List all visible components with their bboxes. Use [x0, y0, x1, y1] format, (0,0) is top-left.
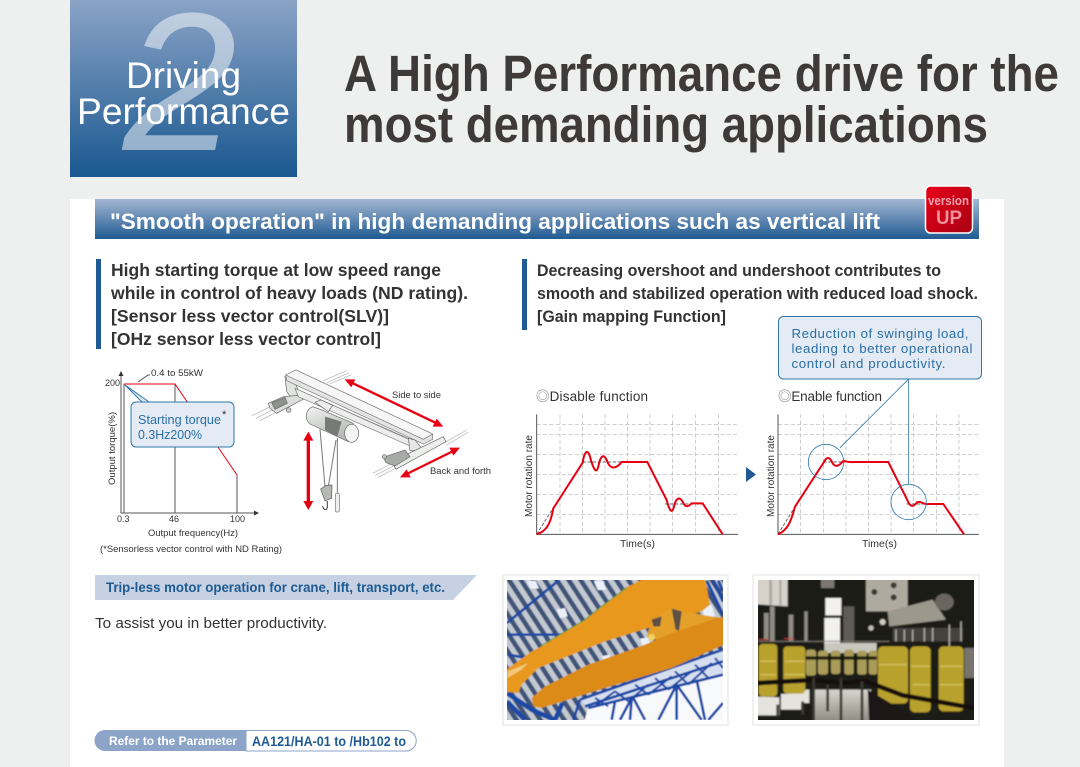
left text block: [OHz sensor less vector control]	[111, 329, 381, 349]
parameter reference pill: AA121/HA-01 to /Hb102 to	[252, 734, 406, 749]
torque chart	[100, 368, 282, 554]
sky and truss	[584, 674, 723, 720]
hoist	[315, 400, 333, 412]
speed curve with reduced overshoot	[778, 458, 964, 534]
torque chart: 46	[169, 514, 179, 524]
left text block: while in control of heavy loads (ND rating).	[110, 283, 468, 303]
torque chart: (*Sensorless vector control with ND Rating)	[100, 544, 282, 554]
sub-heading ribbon	[95, 575, 477, 600]
right text block: [Gain mapping Function]	[537, 307, 726, 326]
red arrows	[303, 379, 460, 510]
badge label: Driving	[126, 55, 241, 96]
callout: reduction of swinging load: Reduction of swinging load,	[792, 326, 968, 341]
crane girders	[502, 578, 710, 693]
lower floor	[814, 688, 872, 720]
photo: bottling line	[758, 580, 974, 720]
rails	[252, 371, 469, 477]
machinery upper	[758, 580, 789, 608]
right text block: Decreasing overshoot and undershoot contributes to	[537, 261, 941, 280]
torque chart: 200	[105, 378, 120, 388]
chart: disable function: Motor rotation rate	[524, 435, 535, 517]
photo: overhead crane	[507, 580, 723, 720]
callout: starting torque	[125, 385, 234, 447]
oil bottles	[759, 644, 964, 712]
crane labels: Side to side	[392, 390, 441, 401]
torque chart: 100	[230, 514, 245, 524]
badge: version UP: UP	[936, 208, 962, 229]
chart: disable function: Time(s)	[620, 539, 655, 550]
callout: reduction of swinging load	[778, 316, 982, 379]
callout: starting torque: Starting torque	[138, 413, 221, 427]
left text block: [Sensor less vector control(SLV)]	[111, 306, 389, 326]
right end truck	[382, 437, 446, 469]
right text block: smooth and stabilized operation with reduced load shock.	[537, 284, 978, 303]
section badge: Driving Performance	[70, 0, 297, 192]
badge: version UP: version	[928, 193, 969, 208]
callout: reduction of swinging load: leading to better operational	[792, 341, 973, 356]
overhead crane illustration	[252, 370, 469, 512]
callout: starting torque: 0.3Hz200%	[138, 428, 202, 442]
heading bar	[95, 199, 979, 239]
photo frame: overhead crane	[503, 575, 728, 725]
parameter reference pill: Refer to the Parameter	[109, 736, 238, 748]
torque curve	[124, 384, 237, 475]
lower web of beam	[295, 388, 412, 446]
chart: enable function: Time(s)	[862, 539, 897, 550]
conveyor belts	[805, 656, 878, 660]
chart: enable function: ◎Enable function	[778, 389, 882, 404]
left text block	[96, 259, 468, 349]
parameter reference pill	[94, 730, 416, 751]
photo frame: bottling line	[753, 575, 979, 725]
chart: enable function: Motor rotation rate	[766, 435, 777, 517]
chart: disable function	[524, 389, 738, 550]
torque chart: 0.3	[117, 514, 130, 524]
callout: starting torque: *	[222, 409, 227, 421]
callout: reduction of swinging load: control and productivity.	[792, 356, 946, 371]
white content panel	[70, 199, 1004, 767]
speed curve with overshoot	[537, 452, 723, 534]
left end truck	[268, 377, 305, 413]
sub-heading ribbon: Trip-less motor operation for crane, lift, transport, etc.	[106, 580, 445, 595]
crane labels	[392, 390, 491, 477]
heading bar: "Smooth operation" in high demanding applications such as vertical lift	[110, 209, 881, 234]
body text: To assist you in better productivity.	[95, 616, 327, 632]
main beam	[286, 370, 433, 444]
badge label	[77, 55, 290, 132]
left text block: High starting torque at low speed range	[111, 260, 441, 280]
badge: version UP	[926, 186, 972, 233]
right text block	[522, 259, 978, 330]
torque chart: Output frequency(Hz)	[148, 528, 238, 538]
crane labels: Back and forth	[430, 466, 491, 477]
page title	[344, 45, 1059, 153]
badge label: Performance	[77, 91, 290, 132]
hook and cable	[320, 429, 337, 493]
highlight circles and leader lines	[808, 379, 926, 520]
page title: most demanding applications	[344, 96, 988, 153]
torque chart: Output torque(%)	[107, 412, 118, 485]
torque chart: 0.4 to 55kW	[151, 368, 204, 378]
chart: disable function: ◎Disable function	[536, 389, 648, 404]
chart: enable function	[766, 379, 979, 550]
arrow between charts	[746, 467, 756, 482]
skylights	[527, 581, 715, 661]
